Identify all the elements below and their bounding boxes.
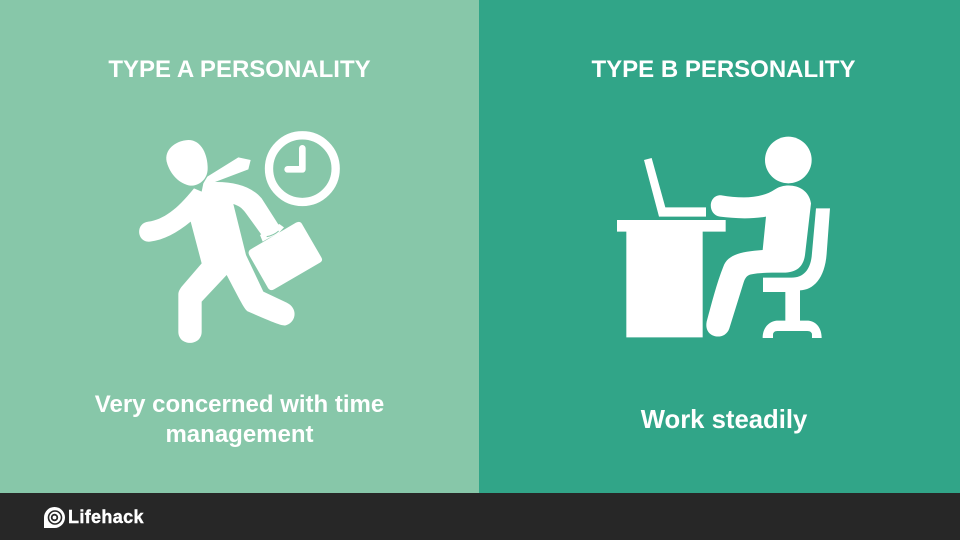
icon: Lifehack mark xyxy=(44,507,65,528)
icon: person working at desk with laptop xyxy=(617,136,830,338)
footer bar xyxy=(0,493,960,540)
icon: running man with briefcase and clock xyxy=(139,131,340,343)
panel: type B xyxy=(479,0,960,493)
text: Lifehack wordmark: Lifehack xyxy=(68,507,144,527)
heading: type A personality: TYPE A PERSONALITY xyxy=(108,56,371,83)
text: type A description: Very concerned with time management xyxy=(95,391,384,448)
panel: type A xyxy=(0,0,479,493)
heading: type B personality: TYPE B PERSONALITY xyxy=(591,56,856,83)
text: type B description: Work steadily xyxy=(641,406,807,434)
logo: Lifehack xyxy=(44,507,144,528)
